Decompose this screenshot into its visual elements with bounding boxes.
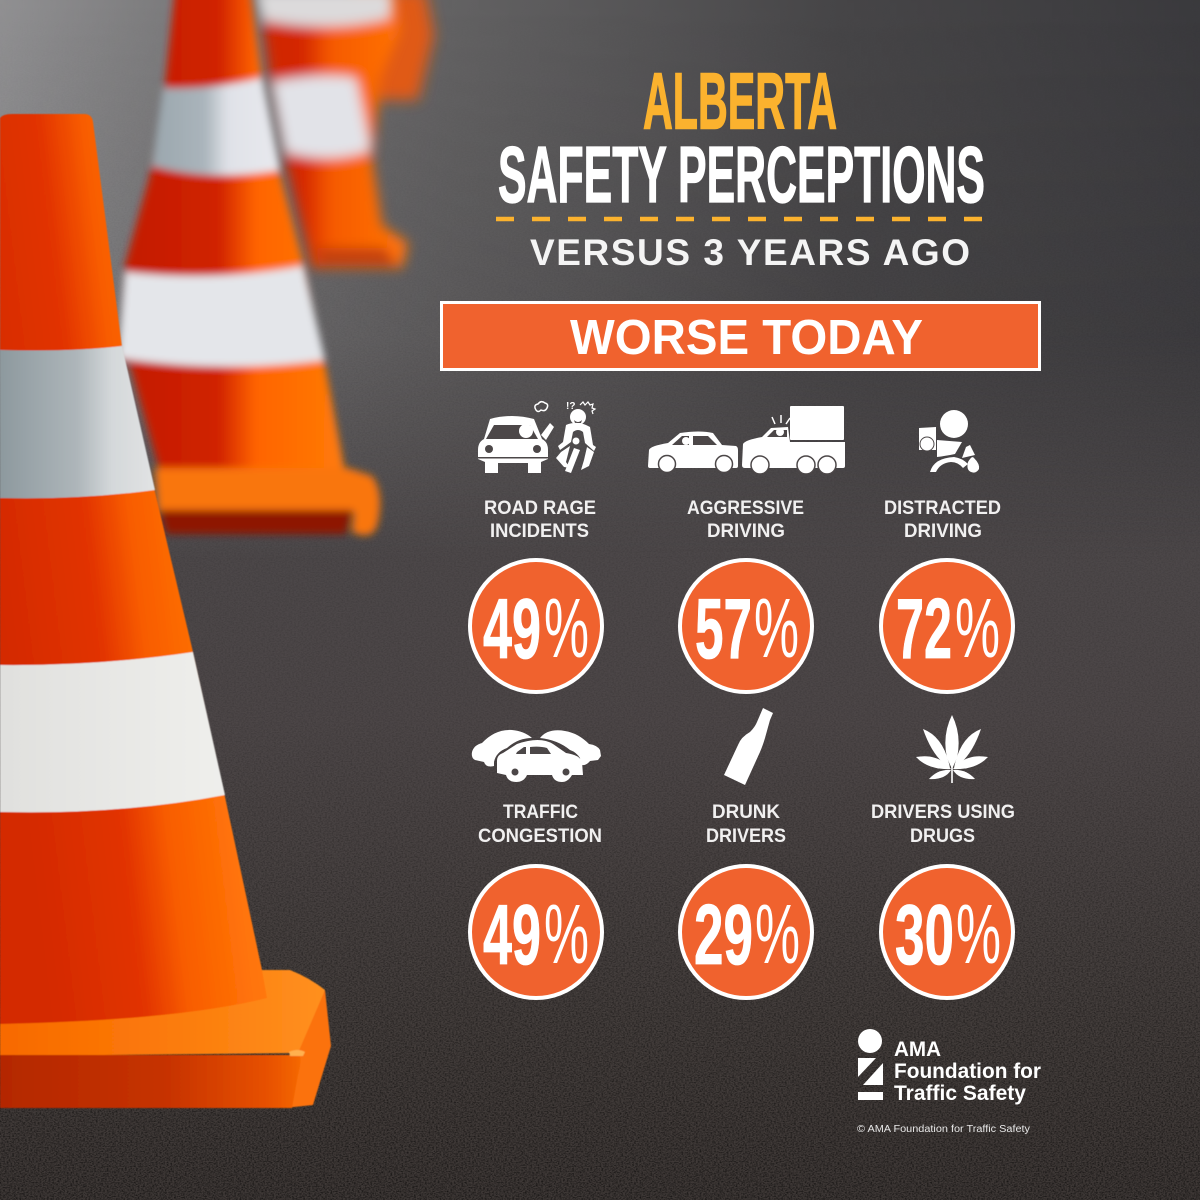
icon: cannabis leaf (916, 715, 988, 783)
stat: aggressive 57% (680, 560, 812, 692)
label: aggressive driving: DRIVING (707, 521, 785, 542)
stat: road rage 49%: 49 (483, 582, 541, 677)
dashed divider (496, 217, 984, 221)
label: drivers using drugs: DRIVERS USING (871, 802, 1015, 823)
stat: aggressive 57%: % (754, 581, 799, 675)
label: drunk drivers: DRIVERS (706, 826, 786, 847)
stat: distracted 72% (881, 560, 1013, 692)
label: drunk drivers: DRUNK (712, 802, 780, 823)
label: distracted driving: DISTRACTED (884, 498, 1001, 519)
logo wordmark: Traffic Safety (894, 1082, 1026, 1105)
stat: road rage 49% (470, 560, 602, 692)
label: distracted driving: DRIVING (904, 521, 982, 542)
label: traffic congestion (478, 802, 602, 847)
photo: foreground cone (0, 114, 331, 1108)
stat: drunk drivers 29%: % (755, 887, 800, 981)
title (496, 56, 985, 273)
cone body (0, 114, 267, 1024)
logo mark (858, 1029, 883, 1100)
logo: AMA Foundation for Traffic Safety (858, 1029, 1041, 1105)
logo wordmark: AMA (894, 1038, 941, 1061)
label: drunk drivers (706, 802, 786, 847)
label: road rage incidents: INCIDENTS (490, 521, 589, 542)
label: drivers using drugs (871, 802, 1015, 847)
icon: distracted driving (919, 410, 979, 473)
label: traffic congestion: TRAFFIC (503, 802, 578, 823)
label: aggressive driving: AGGRESSIVE (687, 498, 804, 519)
icon: road rage car and motorcycle (478, 401, 596, 473)
photo: middle cone (118, 0, 380, 535)
label: road rage incidents: ROAD RAGE (484, 498, 596, 519)
logo wordmark (894, 1038, 1041, 1105)
stat: drunk drivers 29% (680, 866, 812, 998)
label: road rage incidents (484, 498, 596, 542)
label: traffic congestion: CONGESTION (478, 826, 602, 847)
banner: worse today: WORSE TODAY (570, 311, 923, 365)
logo wordmark: Foundation for (894, 1060, 1041, 1083)
banner: worse today (442, 302, 1040, 370)
icon: traffic congestion cars (472, 730, 601, 782)
photo: blurred far cones (256, 0, 434, 268)
stat: drivers using drugs 30%: % (956, 887, 1001, 981)
icon: road rage car and motorcycle: !? (566, 401, 575, 412)
stat: distracted 72%: 72 (896, 582, 952, 677)
label: distracted driving (884, 498, 1001, 542)
stat: road rage 49%: % (544, 581, 589, 675)
label: aggressive driving (687, 498, 804, 542)
label: drivers using drugs: DRUGS (910, 826, 975, 847)
stat: traffic congestion 49% (470, 866, 602, 998)
stat: drivers using drugs 30%: 30 (895, 888, 954, 983)
stat: traffic congestion 49%: % (544, 887, 589, 981)
copyright: © AMA Foundation for Traffic Safety (857, 1124, 1030, 1135)
stat: drunk drivers 29%: 29 (694, 888, 753, 983)
stat: traffic congestion 49%: 49 (483, 888, 541, 983)
stat: aggressive 57%: 57 (695, 582, 752, 677)
subheading: VERSUS 3 YEARS AGO (530, 232, 970, 273)
heading: Alberta: ALBERTA (643, 56, 837, 146)
icon: aggressive driving car and truck (648, 406, 845, 474)
stat: drivers using drugs 30% (881, 866, 1013, 998)
stat: distracted 72%: % (955, 581, 1000, 675)
cone base (0, 970, 325, 1056)
icon: bottle (724, 708, 773, 785)
